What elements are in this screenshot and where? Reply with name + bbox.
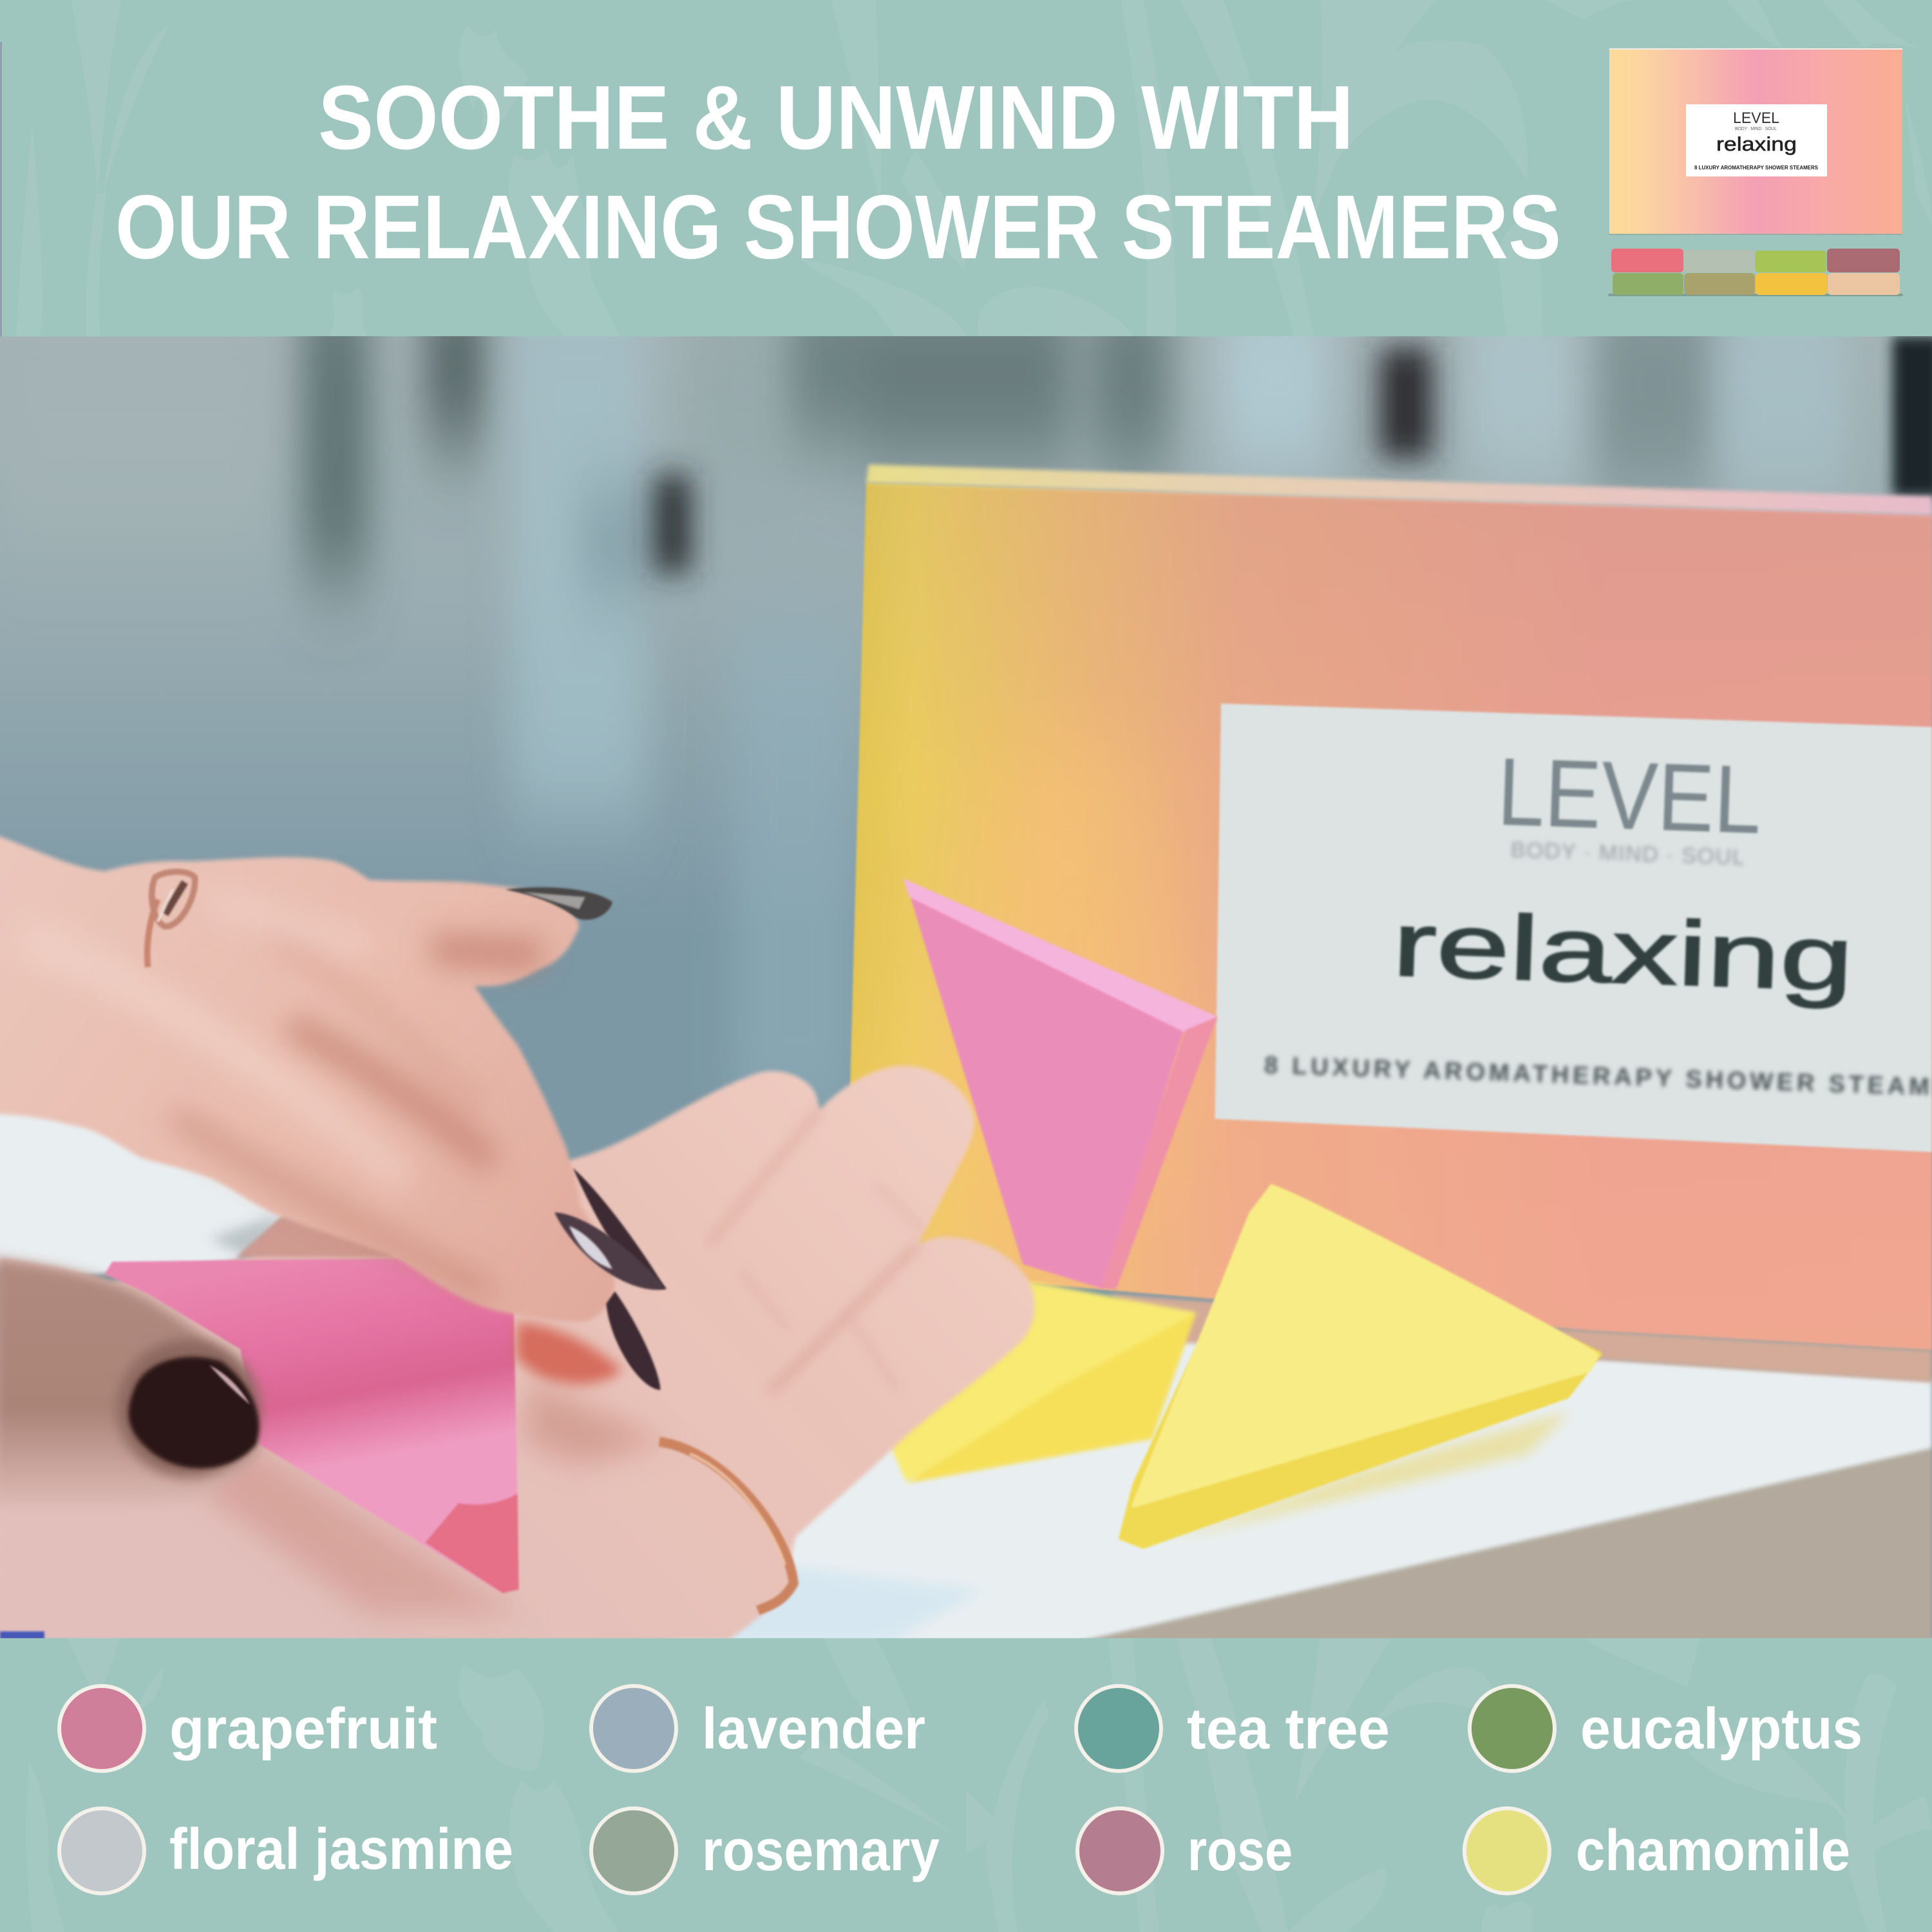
thumb (0, 1258, 262, 1510)
legend item: rosemary: rosemary (702, 1819, 940, 1883)
front yellow steamer (1121, 1186, 1599, 1546)
box top edge (866, 464, 1932, 515)
inset tagline: BODY · MIND · SOUL (1735, 127, 1777, 131)
legend item: eucalyptus (1470, 1686, 1862, 1771)
product name: relaxing (1391, 893, 1855, 1010)
inset label (1686, 104, 1827, 176)
legend item: lavender (591, 1686, 925, 1771)
red finger tip (515, 1322, 622, 1384)
brand tagline: BODY · MIND · SOUL (1510, 838, 1745, 870)
connecting skin (236, 1215, 398, 1258)
lower hand (0, 1066, 1035, 1641)
lower ring (659, 1442, 793, 1611)
standing pink steamer (903, 878, 1217, 1289)
blue wristband (0, 1631, 44, 1641)
legend item: lavender: lavender (702, 1697, 925, 1761)
header leaf pattern (16, 0, 1932, 337)
inset product name: relaxing (1716, 133, 1797, 155)
palm shadow (524, 1380, 665, 1466)
upper hand (0, 834, 615, 1322)
box shadow band (1109, 1294, 1932, 1383)
finger highlights (24, 900, 406, 1183)
spindle nail two (554, 1213, 667, 1290)
legend item: eucalyptus: eucalyptus (1580, 1697, 1862, 1761)
finger creases (708, 1109, 924, 1392)
thumb nail (117, 1340, 260, 1477)
legend item: grapefruit: grapefruit (169, 1697, 437, 1761)
legend item: tea tree: tea tree (1187, 1697, 1390, 1761)
box label (1215, 703, 1932, 1152)
legend item: rose (1077, 1808, 1293, 1893)
legend item: floral jasmine (59, 1808, 513, 1893)
pink steamer in hand (105, 1258, 518, 1593)
legend item: floral jasmine: floral jasmine (169, 1817, 513, 1882)
product box (850, 464, 1932, 1383)
product inset (1608, 48, 1903, 296)
upper ring (147, 872, 195, 967)
inset descriptor: 8 LUXURY AROMATHERAPY SHOWER STEAMERS (1694, 164, 1818, 171)
inset steamers (1608, 249, 1903, 296)
title line two: OUR RELAXING SHOWER STEAMERS (115, 176, 1561, 278)
left tabletop (0, 1112, 283, 1276)
title line one: SOOTHE & UNWIND WITH (318, 66, 1354, 168)
title (115, 66, 1561, 278)
legend item: rose: rose (1188, 1819, 1293, 1883)
top nail (505, 887, 612, 920)
inset box (1609, 48, 1902, 235)
tabletop white (665, 1331, 1932, 1645)
spindle nail three (606, 1291, 661, 1390)
inset brand: LEVEL (1733, 109, 1779, 127)
spindle nail one (573, 1168, 665, 1289)
nails (505, 887, 667, 1390)
brand name: LEVEL (1496, 737, 1763, 854)
back yellow steamer (826, 1257, 1197, 1484)
legend item: tea tree (1076, 1686, 1390, 1771)
box face (850, 483, 1932, 1350)
finger shading (173, 936, 542, 1294)
blurred backdrop (0, 283, 1932, 1638)
legend item: rosemary (591, 1808, 940, 1893)
legend item: grapefruit (59, 1686, 437, 1771)
legend item: chamomile (1464, 1808, 1850, 1893)
legend item: chamomile: chamomile (1576, 1819, 1850, 1883)
palm shade (185, 1442, 530, 1614)
legend (59, 1686, 1862, 1893)
footer leaf pattern (26, 1638, 1932, 1932)
left edge sliver (0, 42, 2, 337)
photo: hands and shower steamers (0, 283, 1932, 1645)
